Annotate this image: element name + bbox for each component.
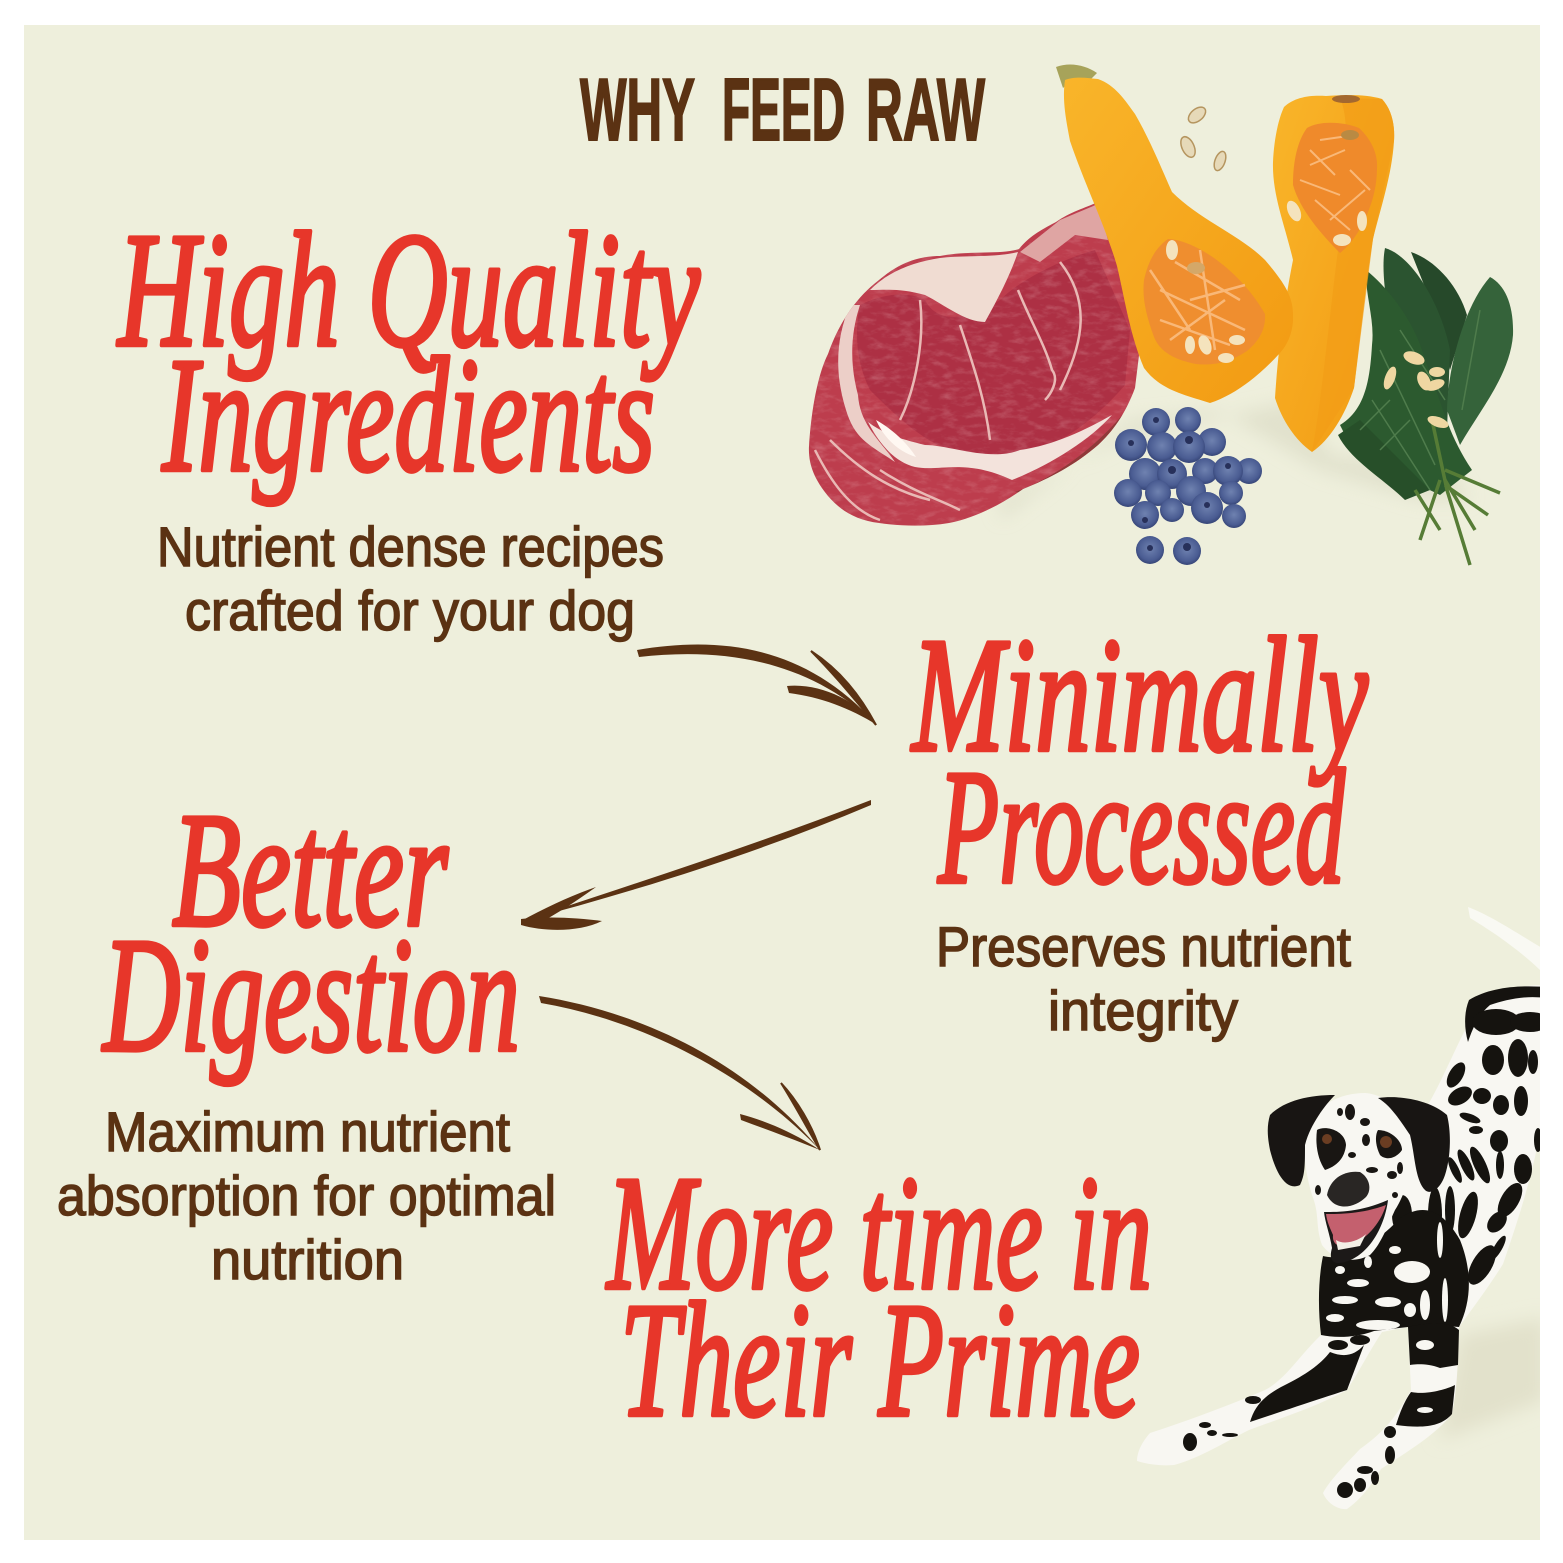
icon: squash half right: [1273, 95, 1394, 452]
heading: more time in their prime: Their Prime: [620, 1270, 1140, 1451]
heading: more time in their prime: More time in: [606, 1143, 1152, 1324]
dog spots: [1183, 986, 1550, 1498]
icon: spinach leaves: [1338, 248, 1513, 565]
text: nutrient dense recipes: Nutrient dense recipes: [157, 515, 664, 578]
heading: minimally processed: [911, 605, 1368, 918]
title: WHY: [580, 60, 695, 159]
title: FEED: [722, 60, 845, 159]
heading: more time in their prime: [606, 1143, 1152, 1451]
text: preserves nutrient integrity: [936, 915, 1351, 1042]
arrow: to more time in their prime: [539, 996, 820, 1150]
heading: high quality ingredients: [117, 200, 700, 506]
dog eyes: [1322, 1134, 1392, 1148]
dog head: [1268, 1093, 1450, 1263]
dog muzzle and nose: [1327, 1172, 1369, 1207]
food shadows: [1000, 400, 1470, 520]
text: nutrient dense recipes: crafted for your dog: [185, 579, 635, 642]
icon: blueberries: [1114, 407, 1262, 565]
text: preserves nutrient integrity: integrity: [1048, 979, 1238, 1042]
dog body: [1137, 985, 1545, 1509]
icon: pumpkin seeds: [1178, 104, 1228, 172]
heading: high quality ingredients: High Quality: [117, 200, 700, 381]
text: maximum nutrient absorption: nutrition: [211, 1228, 404, 1291]
heading: high quality ingredients: Ingredients: [161, 325, 655, 506]
text: preserves nutrient integrity: Preserves nutrient: [936, 915, 1351, 978]
dog face spots: [1315, 1104, 1403, 1198]
dog tail: [1468, 907, 1542, 972]
heading: better digestion: Better: [172, 780, 449, 961]
dog right ear: [1378, 1097, 1450, 1192]
title: RAW: [866, 60, 985, 159]
illustration: dalmatian dog: [1137, 907, 1550, 1509]
text: nutrient dense recipes: [157, 515, 664, 642]
text: maximum nutrient absorption: Maximum nutrient: [105, 1100, 510, 1163]
text: maximum nutrient absorption: [57, 1100, 556, 1291]
icon: beef steak: [808, 204, 1139, 526]
text: maximum nutrient absorption: absorption for optimal: [57, 1164, 556, 1227]
arrow: to minimally processed: [637, 645, 877, 725]
dog mouth: [1324, 1200, 1388, 1263]
title: [580, 60, 985, 159]
icon: squash half left: [1056, 65, 1293, 403]
heading: better digestion: Digestion: [102, 905, 520, 1086]
arrow: to better digestion: [521, 800, 871, 930]
heading: better digestion: [102, 780, 520, 1086]
dog left ear: [1268, 1095, 1335, 1186]
illustration: raw ingredients: [800, 65, 1513, 565]
dog shadow: [1444, 1322, 1540, 1434]
